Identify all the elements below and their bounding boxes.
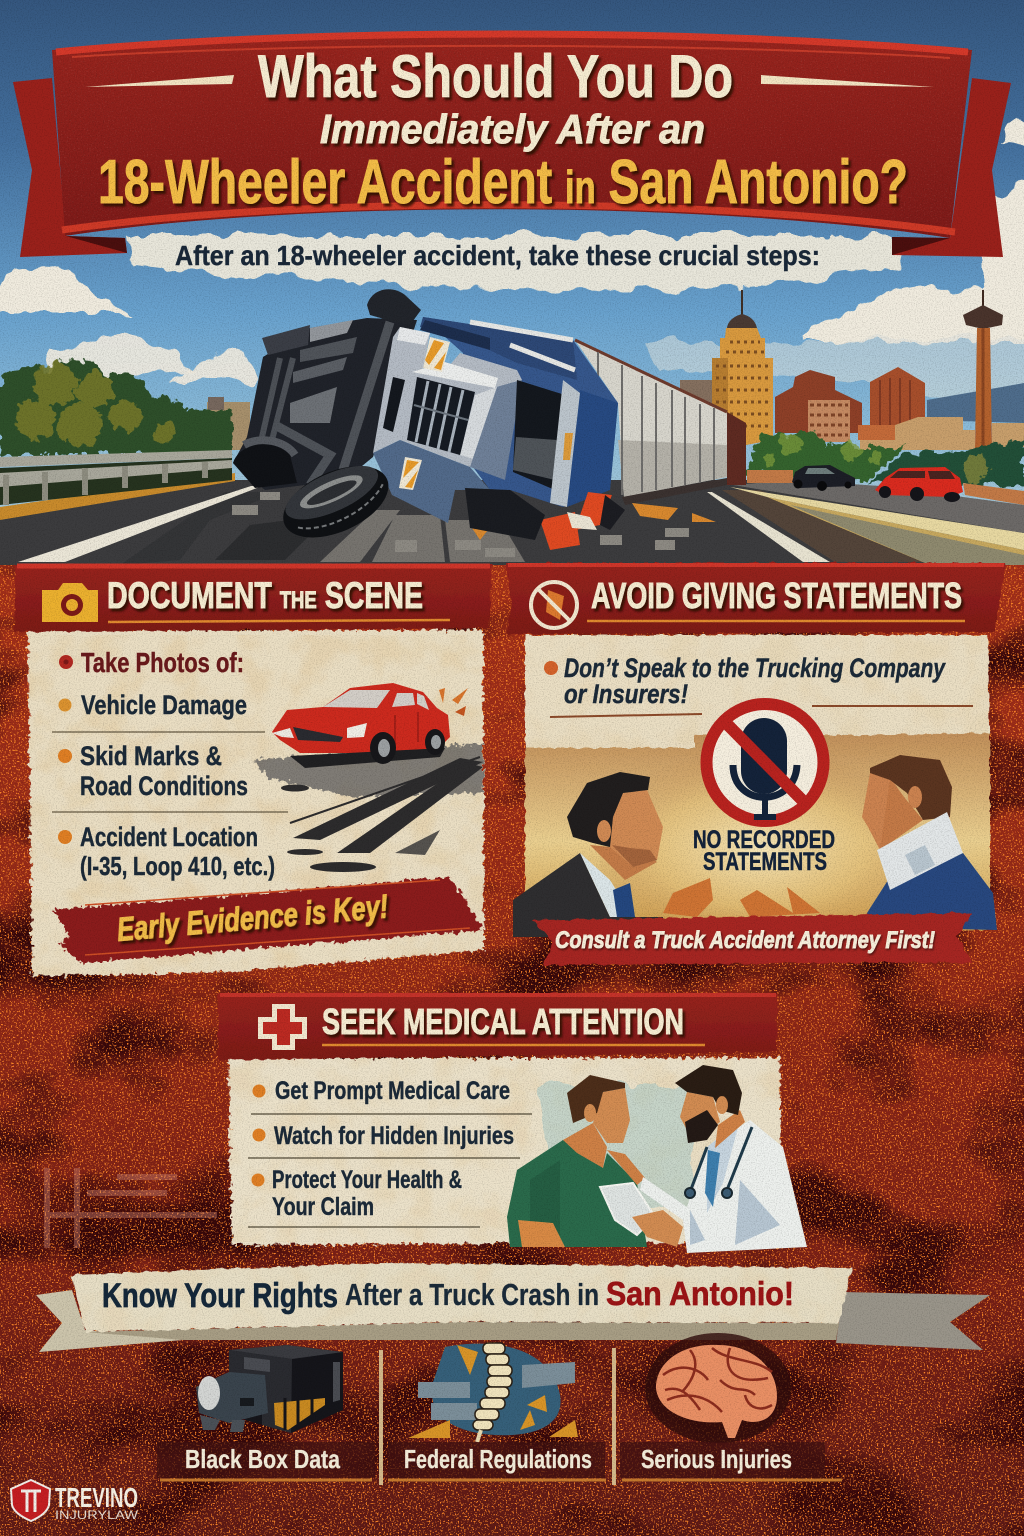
panel: avoid giving statements (505, 563, 1005, 965)
lower body (373, 440, 490, 523)
warm background scene (525, 733, 990, 930)
low cream buildings (858, 417, 1024, 450)
checklist: Watch for Hidden Injuries (274, 1122, 514, 1150)
icon: damaged red car (272, 683, 468, 768)
heading text: DOCUMENT THE SCENE (107, 575, 423, 616)
sign caption (693, 826, 835, 876)
dark car (792, 465, 855, 491)
checklist: Get Prompt Medical Care (275, 1077, 510, 1105)
illustration: attorney (513, 772, 713, 937)
grille (407, 377, 475, 455)
cracked pavement and debris (320, 510, 525, 562)
patient (507, 1075, 647, 1247)
icon: spine and federal regulations (408, 1343, 578, 1442)
distant hills (927, 383, 1024, 423)
checklist: Your Claim (272, 1193, 374, 1221)
checklist: Skid Marks & (80, 741, 222, 771)
guardrail (0, 450, 232, 505)
callout ribbon: Consult a Truck Accident Attorney First! (555, 927, 935, 954)
cars on the highway (792, 465, 963, 502)
skyline (207, 290, 1024, 450)
panel: seek medical attention (218, 993, 807, 1253)
labels: three key topics: Serious Injuries (641, 1444, 792, 1474)
labels: three key topics: Federal Regulations (404, 1444, 592, 1474)
silver front panel (373, 327, 522, 480)
paper card (228, 1058, 783, 1245)
illustration: injured man with neck brace (740, 755, 997, 930)
clouds (0, 118, 1024, 400)
logo: Trevino Injury Law: INJURYLAW (55, 1508, 139, 1522)
banner: know your rights: After a Truck Crash in (345, 1277, 599, 1312)
checklist: Protect Your Health & (272, 1166, 462, 1194)
brick tower 2 (870, 367, 925, 433)
title banner (13, 20, 1011, 257)
subtitle: After an 18-wheeler accident, take these crucial steps: (175, 240, 820, 271)
panel: document the scene (15, 565, 492, 976)
illustration: patient and doctor (507, 1065, 807, 1253)
icon: black box recorder (196, 1345, 343, 1433)
checklist: Road Conditions (80, 771, 248, 801)
heading text: SEEK MEDICAL ATTENTION (322, 1001, 684, 1042)
decorative title rules (85, 75, 934, 87)
callout ribbon: Early Evidence is Key! (115, 887, 390, 948)
warning text (544, 653, 973, 717)
hazard stripes (399, 337, 450, 490)
labels: three key topics (157, 1442, 842, 1480)
banner tails (13, 78, 1011, 257)
windshield and pillar (513, 380, 580, 507)
title line 1: What Should You Do (258, 43, 733, 110)
callout ribbon (533, 913, 973, 965)
top wheel (367, 289, 421, 325)
logo shield (11, 1480, 50, 1521)
checklist: Accident Location (80, 822, 258, 852)
blue cab body (420, 317, 618, 507)
icon: medical cross (258, 1004, 307, 1050)
loose tire (272, 452, 399, 552)
background: sky (0, 0, 1024, 570)
skid marks (253, 743, 483, 872)
heading banner (218, 993, 778, 1060)
red brick building (775, 370, 862, 442)
paper card (28, 630, 484, 976)
labels: three key topics: Black Box Data (185, 1444, 340, 1474)
ribbon tails (36, 1290, 990, 1352)
logo: Trevino Injury Law (11, 1480, 139, 1522)
logo: Trevino Injury Law: TREVINO (55, 1482, 138, 1513)
red car (875, 467, 963, 502)
trailer (575, 340, 746, 505)
doctor (600, 1065, 807, 1253)
title line 2: Immediately After an (320, 106, 705, 152)
banner: know your rights (36, 1263, 990, 1352)
warning text: or Insurers! (564, 679, 688, 709)
background: rust red textured lower wall (0, 558, 1024, 1536)
heading banner (505, 563, 1005, 634)
icon: prohibited hand (531, 582, 577, 628)
callout ribbon (52, 877, 483, 963)
column dividers (379, 1348, 616, 1485)
Tower of the Americas (963, 290, 1003, 448)
banner text: Know Your Rights (102, 1277, 338, 1315)
checklist: Take Photos of: (81, 647, 244, 678)
tower building (712, 290, 773, 450)
road and shoulders (0, 470, 1024, 565)
title line 3: 18-Wheeler Accident in San Antonio? (98, 148, 908, 217)
checklist (52, 647, 288, 881)
icon: no recording sign (706, 704, 824, 821)
paper card (525, 635, 990, 755)
red-orange debris (465, 488, 716, 550)
heading banner (15, 565, 492, 632)
banner: know your rights: San Antonio! (606, 1275, 794, 1312)
checklist (248, 1077, 532, 1227)
dark underside chassis (233, 318, 417, 490)
icon: brain (645, 1333, 791, 1443)
trees (0, 359, 1024, 485)
icon: camera (42, 583, 98, 622)
checklist: (I-35, Loop 410, etc.) (80, 851, 275, 881)
sign caption: STATEMENTS (703, 848, 827, 876)
checklist: Vehicle Damage (81, 690, 247, 720)
sign caption: NO RECORDED (693, 826, 835, 854)
illustration: overturned semi truck (233, 289, 746, 552)
